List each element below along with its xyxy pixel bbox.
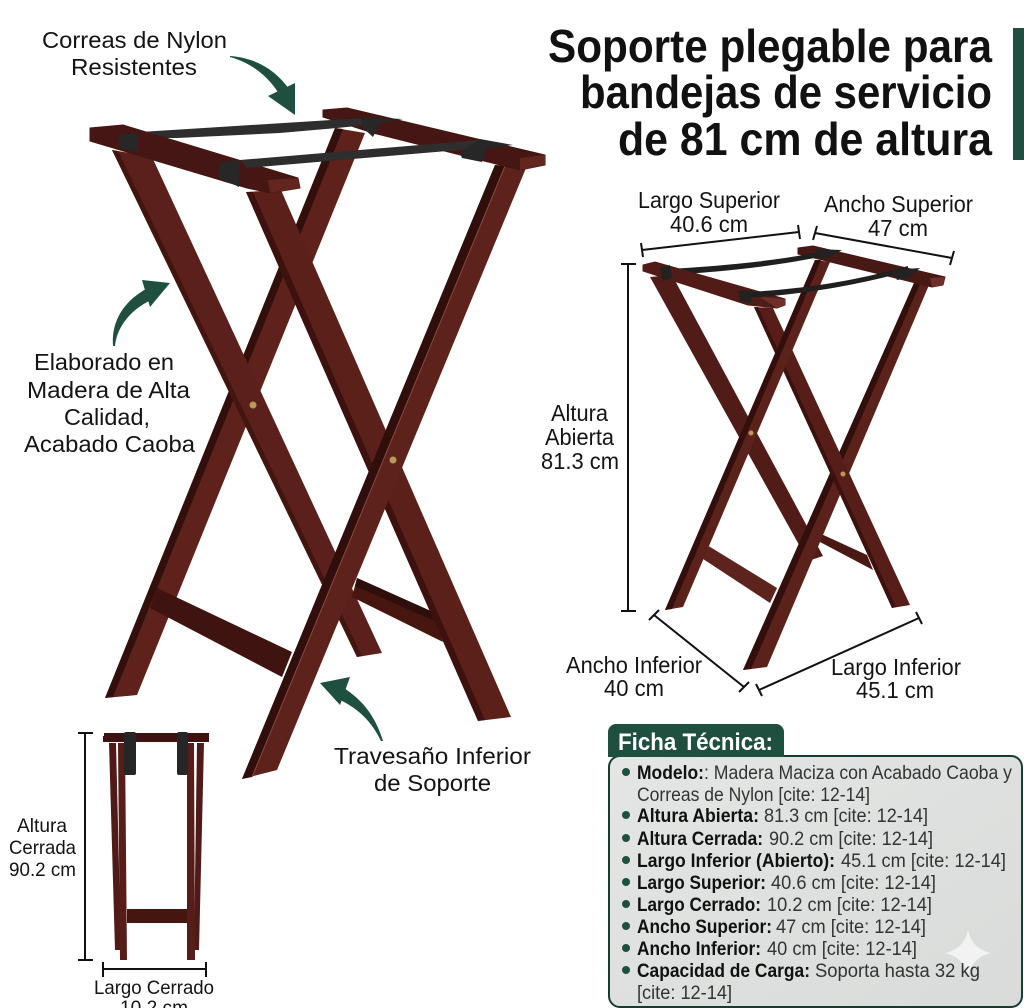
spec list text: [cite: 12-14] [637, 983, 732, 1004]
dimension: bottom length: Largo Inferior [831, 654, 961, 680]
dimension: closed length [94, 962, 214, 1008]
dimension: top width: 47 cm [868, 215, 928, 241]
spec list text [637, 763, 1012, 1004]
spec list text: Soporta hasta 32 kg [815, 961, 980, 982]
title: bandejas de servicio [580, 66, 992, 118]
label: lower crossbar: de Soporte [374, 770, 491, 796]
title: Soporte plegable para [548, 20, 992, 72]
dimension: top length [638, 187, 800, 257]
title accent bar [1013, 28, 1024, 160]
spec list text: 10.2 cm [cite: 12-14] [767, 895, 932, 916]
spec list text: Largo Superior: [637, 873, 766, 894]
spec list text: Capacidad de Carga: [637, 961, 810, 982]
dimension: bottom width [566, 610, 749, 701]
dimension: bottom width: 40 cm [604, 675, 664, 701]
dimension: closed length: Largo Cerrado [94, 977, 214, 999]
spec list text: Altura Abierta: [637, 806, 759, 827]
dimension: closed height: Altura [17, 815, 67, 837]
spec list text: Largo Cerrado: [637, 895, 761, 916]
spec list text: Ancho Inferior: [637, 939, 761, 960]
panel tab heading: Ficha Técnica: [618, 729, 773, 756]
spec list text: 45.1 cm [cite: 12-14] [841, 851, 1006, 872]
label: lower crossbar [334, 743, 531, 796]
dimensioned open stand photo [643, 246, 945, 670]
arrow: to straps [230, 56, 295, 115]
dimension: top length: Largo Superior [638, 187, 780, 213]
label: wood [24, 349, 195, 457]
label: nylon straps: Resistentes [71, 54, 197, 80]
dimension: open height: 81.3 cm [541, 448, 619, 474]
label: wood: Elaborado en [34, 349, 174, 375]
label: wood: Acabado Caoba [24, 431, 195, 457]
panel: technical sheet [608, 724, 1022, 1007]
dimension: open height [541, 264, 636, 611]
spec list text: Largo Inferior (Abierto): [637, 851, 835, 872]
spec list text: 81.3 cm [cite: 12-14] [764, 806, 928, 827]
dimension: bottom length [756, 612, 961, 703]
spec list text: 47 cm [cite: 12-14] [776, 917, 926, 938]
label: lower crossbar: Travesaño Inferior [334, 743, 531, 769]
dimension: bottom length: 45.1 cm [856, 677, 934, 703]
dimension: top width: Ancho Superior [824, 191, 973, 217]
spec list text: Correas de Nylon [cite: 12-14] [637, 785, 870, 806]
dimension: open height: Altura [551, 400, 608, 426]
main folding stand photo [90, 108, 545, 779]
closed stand photo [103, 732, 209, 960]
spec list text: Altura Cerrada: [637, 829, 763, 850]
dimension: closed height: 90.2 cm [9, 859, 76, 881]
title [548, 20, 992, 165]
dimension: closed height [9, 733, 93, 960]
spec list text: 40 cm [cite: 12-14] [767, 939, 917, 960]
arrow: to crossbar [320, 677, 383, 741]
label: wood: Madera de Alta [27, 377, 190, 403]
spec list text: Modelo: [637, 763, 704, 784]
spec list text: 90.2 cm [cite: 12-14] [769, 829, 933, 850]
dimension: open height: Abierta [545, 424, 614, 450]
label: nylon straps: Correas de Nylon [42, 27, 227, 53]
spec list text: 40.6 cm [cite: 12-14] [771, 873, 936, 894]
label: nylon straps [42, 27, 227, 80]
arrow: to wood [113, 280, 170, 346]
dimension: top length: 40.6 cm [670, 211, 748, 237]
icon: sparkle watermark [945, 930, 991, 976]
label: wood: Calidad, [64, 404, 150, 430]
dimension: top width [813, 191, 973, 265]
spec list text: Ancho Superior: [637, 917, 772, 938]
title: de 81 cm de altura [618, 113, 992, 165]
dimension: closed height: Cerrada [9, 837, 76, 859]
dimension: bottom width: Ancho Inferior [566, 652, 702, 678]
bullet markers [622, 768, 630, 974]
